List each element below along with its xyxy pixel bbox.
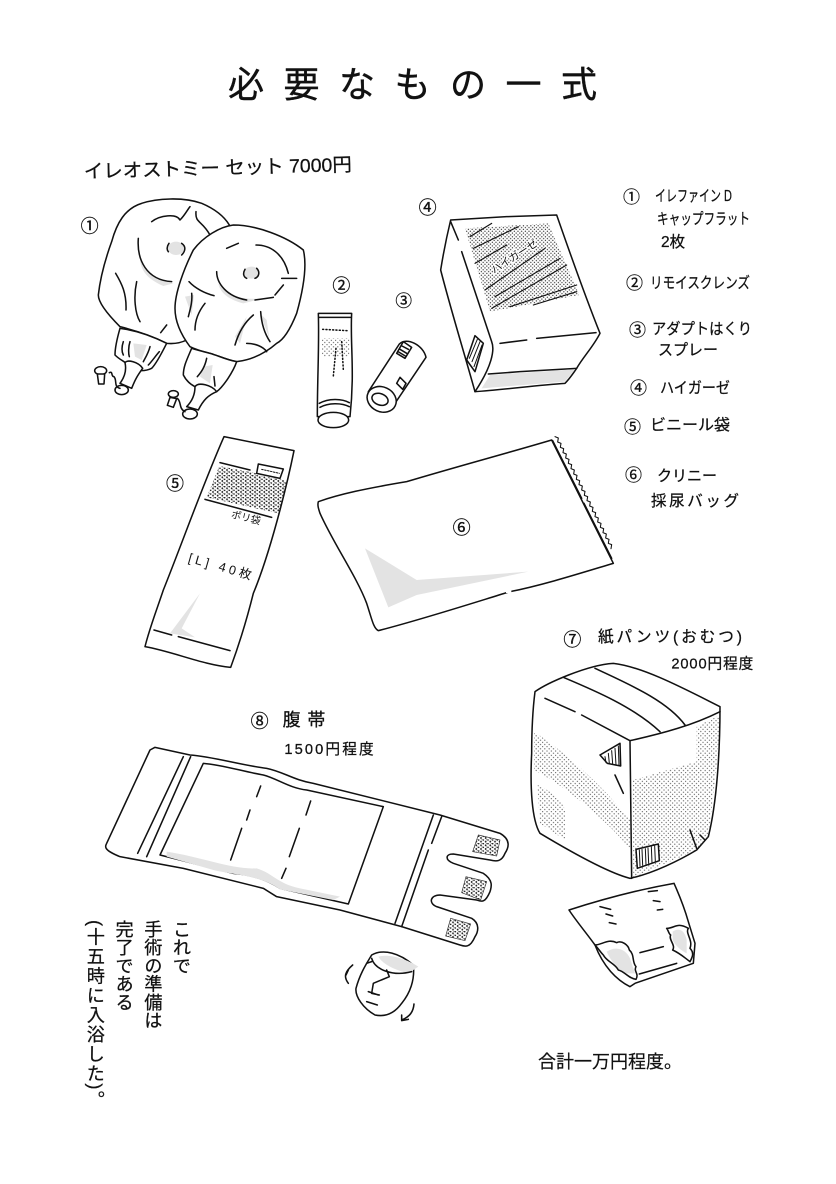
legend 1 <box>623 188 750 251</box>
legend 6 <box>625 466 739 510</box>
item 6: collection bag <box>318 437 613 631</box>
legend 1: イレファイン D <box>655 188 732 205</box>
closing vertical note: これで <box>171 920 191 975</box>
price 7: 2000円程度 <box>671 656 754 673</box>
number 6: ⑥ <box>453 518 471 538</box>
price 8: 1500円程度 <box>284 741 374 758</box>
item 1: ostomy pouches <box>81 199 305 419</box>
legend list <box>623 188 752 510</box>
legend 1: ① <box>623 188 640 207</box>
legend 6: 採尿バッグ <box>651 492 739 510</box>
legend 4: ④ <box>630 379 647 398</box>
number 8: ⑧ <box>251 711 269 731</box>
legend 5 <box>624 416 730 437</box>
tube <box>317 313 352 428</box>
back pouch <box>95 199 229 395</box>
number 3: ③ <box>395 292 412 311</box>
legend 6: クリニー <box>657 467 717 485</box>
legend 2: リモイスクレンズ <box>650 274 750 292</box>
closing vertical note <box>84 920 191 1110</box>
package label: ハイガーゼ <box>489 237 540 277</box>
item 5: plastic bag package <box>145 437 294 667</box>
label 7: 紙パンツ(おむつ) <box>598 628 742 646</box>
items 5 and 6: plastic bags <box>145 437 613 667</box>
legend 4 <box>630 379 730 398</box>
legend 3: アダプトはくり <box>652 320 752 338</box>
number 2: ② <box>332 276 350 296</box>
legend 4: ハイガーゼ <box>660 379 730 397</box>
legend 5: ⑤ <box>624 418 641 437</box>
item 4: gauze box <box>419 198 600 392</box>
legend 3: スプレー <box>658 341 718 359</box>
number 4: ④ <box>419 198 437 218</box>
legend 3: ③ <box>629 321 646 340</box>
legend 2 <box>626 274 750 293</box>
legend 2: ② <box>626 274 643 293</box>
legend 3 <box>629 320 752 359</box>
closing vertical note: 完了である <box>114 920 134 1011</box>
legend 5: ビニール袋 <box>650 416 730 434</box>
legend 1: キャップフラット <box>657 210 750 228</box>
front pouch <box>167 225 305 419</box>
total cost note: 合計一万円程度。 <box>538 1052 682 1072</box>
subtitle: ileostomy set price: イレオストミー セット 7000円 <box>84 155 352 183</box>
spray can <box>363 341 426 417</box>
closing vertical note: 手術の準備は <box>142 920 162 1029</box>
diaper <box>569 883 695 987</box>
legend 1: 2枚 <box>661 233 686 251</box>
box <box>531 663 720 878</box>
items 2 and 3: tube and spray can <box>317 276 426 428</box>
item 7: paper pants <box>531 628 754 987</box>
closing vertical note: (十五時に入浴した)。 <box>85 920 105 1110</box>
number 7: ⑦ <box>563 630 581 650</box>
box <box>441 215 600 392</box>
rolled belt <box>345 952 418 1021</box>
number 5: ⑤ <box>166 474 184 494</box>
legend 6: ⑥ <box>625 466 642 485</box>
belt <box>106 747 508 946</box>
item 8: abdominal belt <box>106 710 508 1021</box>
number 1: ① <box>81 217 99 237</box>
size and count: [L] 40枚 <box>187 551 254 583</box>
package text: ポリ袋 <box>230 508 262 527</box>
rotation arrows <box>345 965 414 1021</box>
label 8: 腹帯 <box>283 710 325 730</box>
title: 必要なもの一式 <box>228 64 617 105</box>
